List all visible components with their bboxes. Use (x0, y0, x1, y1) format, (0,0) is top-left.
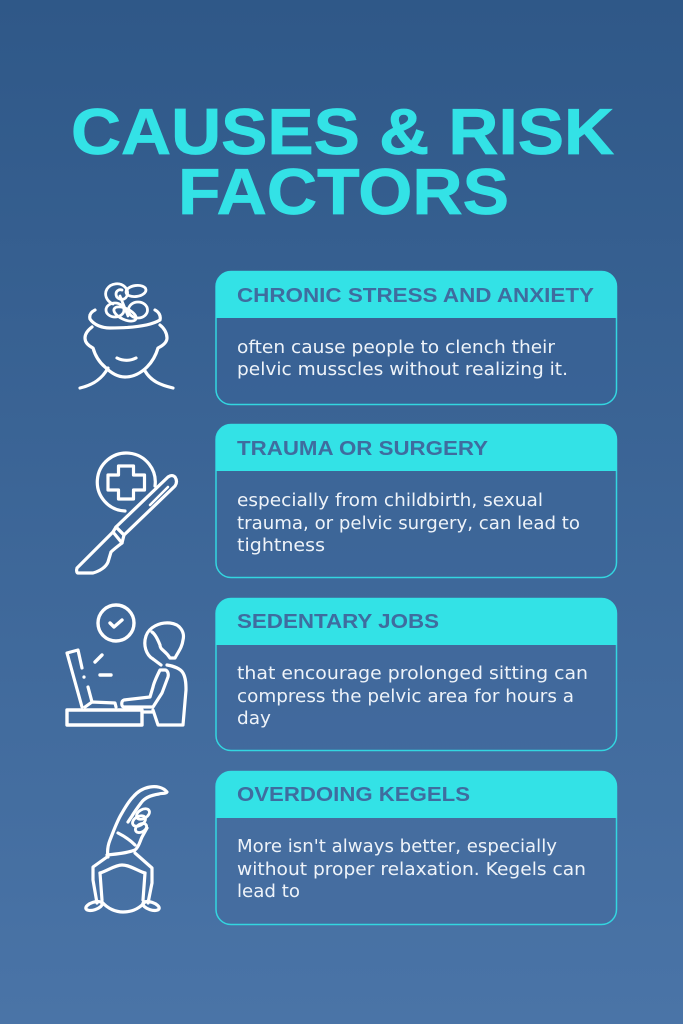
panel: chronic stress and anxiety (216, 271, 617, 404)
title: CAUSES & RISK (71, 95, 614, 168)
panel: sedentary jobs: day (237, 709, 271, 729)
panel: trauma or surgery: especially from childbirth, sexual (237, 491, 543, 511)
panel: chronic stress and anxiety: CHRONIC STRESS AND ANXIETY (237, 284, 594, 307)
panel: trauma or surgery: tightness (237, 536, 325, 556)
panel: trauma or surgery: TRAUMA OR SURGERY (237, 437, 488, 460)
panel heading: kegels (216, 771, 617, 818)
panel: overdoing kegels: OVERDOING KEGELS (237, 783, 470, 806)
panel: sedentary jobs: compress the pelvic area for hours a (237, 687, 574, 707)
panel heading: sedentary (216, 598, 617, 645)
panel: chronic stress and anxiety: pelvic musscles without realizing it. (237, 360, 568, 380)
panel: overdoing kegels (216, 771, 617, 924)
panel: trauma or surgery (216, 424, 617, 578)
panel: overdoing kegels: lead to (237, 882, 300, 902)
panel heading: chronic stress (216, 271, 617, 318)
panel: overdoing kegels: More isn't always better, especially (237, 837, 557, 857)
panel: overdoing kegels: without proper relaxation. Kegels can (237, 860, 586, 880)
panel: sedentary jobs: that encourage prolonged sitting can (237, 664, 588, 684)
title: FACTORS (178, 155, 509, 228)
title (71, 95, 614, 228)
panel: sedentary jobs (216, 598, 617, 750)
icon: person stretching on exercise ball (85, 787, 167, 912)
panel: sedentary jobs: SEDENTARY JOBS (237, 610, 439, 633)
icon: person working at laptop with clock (67, 605, 186, 725)
panel: chronic stress and anxiety: often cause people to clench their (237, 338, 556, 358)
icon: scalpel and medical cross (77, 453, 176, 573)
icon: head with tangled thoughts (80, 284, 173, 388)
panel heading: trauma (216, 424, 617, 471)
panel: trauma or surgery: trauma, or pelvic surgery, can lead to (237, 514, 580, 534)
